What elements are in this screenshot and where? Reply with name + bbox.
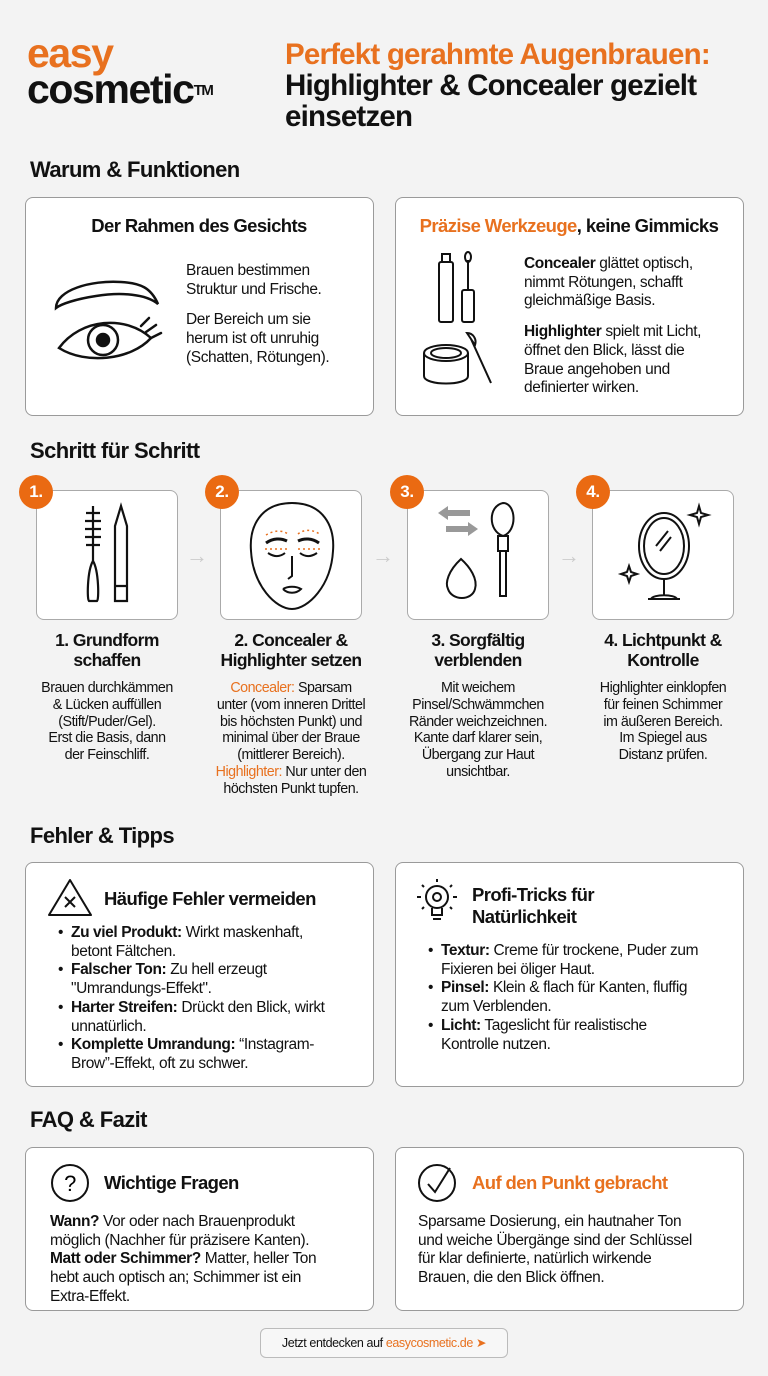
list: unnatürlich. — [71, 1018, 146, 1035]
number 3: 3. — [400, 482, 414, 501]
text: Struktur und Frische. Der Bereich um sie — [186, 281, 321, 328]
step 4 title: Kontrolle — [627, 650, 699, 670]
heading: FAQ & Fazit: FAQ & Fazit — [30, 1107, 147, 1132]
text — [524, 255, 701, 396]
text: (Schatten, Rötungen). — [186, 349, 329, 366]
step 3 text: Kante darf klarer sein, — [414, 730, 542, 746]
logo: cosmeticTM — [27, 66, 212, 112]
step 2 text: minimal über der Braue — [222, 730, 360, 746]
step 1 text: (Stift/Puder/Gel). — [58, 714, 156, 730]
step 3 text: Mit weichem — [441, 680, 515, 696]
icon: concealer tube — [438, 251, 475, 323]
arrow 2: → — [372, 543, 394, 568]
step 3 text: Pinsel/Schwämmchen — [412, 697, 544, 713]
step 1 title: schaffen — [73, 650, 141, 670]
panel title: Natürlichkeit — [472, 906, 576, 927]
step 4 text: Im Spiegel aus — [619, 730, 707, 746]
number 1 — [19, 475, 53, 509]
step 2 box — [220, 490, 362, 620]
step 3 text: Ränder weichzeichnen. — [409, 714, 547, 730]
heading: Schritt für Schritt: Schritt für Schritt — [30, 438, 200, 463]
text — [50, 1213, 316, 1305]
heading: Fehler & Tipps: Fehler & Tipps — [30, 823, 174, 848]
panel: Häufige Fehler — [25, 862, 374, 1087]
step 4 text — [600, 680, 726, 763]
text: definierter wirken. — [524, 379, 639, 396]
title: Perfekt gerahmte Augenbrauen: — [285, 38, 710, 71]
number 4: 4. — [586, 482, 600, 501]
step 1 text: Brauen durchkämmen — [41, 680, 173, 696]
text: Concealer glättet optisch, — [524, 255, 693, 272]
step 4 text: im äußeren Bereich. — [603, 714, 723, 730]
step 3 text — [409, 680, 547, 780]
list: Brow”-Effekt, oft zu schwer. — [71, 1055, 248, 1072]
step 2 title — [221, 630, 361, 670]
step 1 text: der Feinschliff. — [65, 747, 149, 763]
list: Falscher Ton: Zu hell erzeugt — [71, 961, 267, 978]
step 3 title: verblenden — [434, 650, 522, 670]
number 3 — [390, 475, 424, 509]
panel title: Auf den Punkt gebracht — [472, 1172, 667, 1193]
number 4 — [576, 475, 610, 509]
icon: question — [51, 1164, 89, 1202]
step 1 text: Erst die Basis, dann — [48, 730, 166, 746]
text: öffnet den Blick, lässt die — [524, 342, 684, 359]
step 1 box — [36, 490, 178, 620]
step 3 title — [431, 630, 525, 670]
step 1 text: & Lücken auffüllen — [53, 697, 161, 713]
panel: Präzise Werkzeuge — [395, 197, 744, 416]
icon: eye with brow — [54, 280, 162, 360]
text: Extra-Effekt. — [50, 1288, 130, 1305]
list — [428, 942, 698, 1053]
number 2 — [205, 475, 239, 509]
step 3 text: unsichtbar. — [446, 764, 510, 780]
title: Highlighter & Concealer gezielt — [285, 69, 696, 102]
icon: check — [418, 1164, 456, 1202]
icon: lightbulb — [417, 879, 457, 920]
list: Licht: Tageslicht für realistische — [441, 1017, 647, 1034]
panel title: Häufige Fehler vermeiden — [104, 888, 316, 909]
panel: Wichtige Fragen — [25, 1147, 374, 1311]
step 2 text: (mittlerer Bereich). — [237, 747, 345, 763]
panel title: Profi-Tricks für — [472, 884, 594, 905]
list — [58, 924, 325, 1072]
panel title: Präzise Werkzeuge, keine Gimmicks — [420, 215, 718, 236]
step 4 text: Distanz prüfen. — [619, 747, 707, 763]
list: "Umrandungs-Effekt". — [71, 980, 212, 997]
step 3 box — [407, 490, 549, 620]
text — [186, 262, 329, 366]
list: Kontrolle nutzen. — [441, 1036, 551, 1053]
number 2: 2. — [215, 482, 229, 501]
text — [418, 1213, 692, 1286]
text: Wann? Vor oder nach Brauenprodukt — [50, 1213, 295, 1230]
step 2 text: bis höchsten Punkt) und — [220, 714, 362, 730]
panel title: Der Rahmen des Gesichts — [91, 215, 307, 236]
step 2 title: Highlighter setzen — [221, 650, 361, 670]
text: Brauen, die den Blick öffnen. — [418, 1269, 604, 1286]
text: herum ist oft unruhig — [186, 330, 319, 347]
panel: Auf den Punkt gebracht — [395, 1147, 744, 1311]
panel title: Wichtige Fragen — [104, 1172, 239, 1193]
step 2 text: Concealer: Sparsam — [230, 680, 352, 696]
step 3 title: 3. Sorgfältig — [431, 630, 525, 650]
list: zum Verblenden. — [441, 998, 551, 1015]
text: Matt oder Schimmer? Matter, heller Ton — [50, 1250, 316, 1267]
step 2 text: höchsten Punkt tupfen. — [223, 781, 359, 797]
footer link pill — [260, 1328, 508, 1358]
step 2 text: Highlighter: Nur unter den — [216, 764, 366, 780]
list: Komplette Umrandung: “Instagram- — [71, 1036, 314, 1053]
text: hebt auch optisch an; Schimmer ist ein — [50, 1269, 301, 1286]
list: Pinsel: Klein & flach für Kanten, fluffig — [441, 979, 687, 996]
logo: easy — [27, 30, 113, 76]
panel: Rahmen des Gesichts — [25, 197, 374, 416]
list: Textur: Creme für trockene, Puder zum — [441, 942, 698, 959]
step 4 text: für feinen Schimmer — [604, 697, 722, 713]
panel title — [472, 884, 594, 927]
icon: warning x — [48, 879, 92, 916]
step 4 text: Highlighter einklopfen — [600, 680, 726, 696]
text: Brauen bestimmen — [186, 262, 310, 279]
icon: question: ? — [64, 1171, 76, 1196]
heading: Warum & Funktionen: Warum & Funktionen — [30, 157, 240, 182]
logo — [27, 30, 213, 112]
list: betont Fältchen. — [71, 943, 176, 960]
footer link pill: Jetzt entdecken auf easycosmetic.de ➤ — [282, 1336, 486, 1350]
icon: jar and brush — [423, 332, 492, 384]
step 3 text: Übergang zur Haut — [422, 747, 534, 763]
step 4 box — [592, 490, 734, 620]
list: Harter Streifen: Drückt den Blick, wirkt — [71, 999, 325, 1016]
step 4 title — [604, 630, 722, 670]
text: nimmt Rötungen, schafft — [524, 274, 683, 291]
arrow 1: → — [186, 543, 208, 568]
text: möglich (Nachher für präzisere Kanten). — [50, 1232, 309, 1249]
text: Sparsame Dosierung, ein hautnaher Ton — [418, 1213, 681, 1230]
text: und weiche Übergänge sind der Schlüssel — [418, 1232, 692, 1249]
list: Zu viel Produkt: Wirkt maskenhaft, — [71, 924, 303, 941]
step 1 text — [41, 680, 173, 763]
text: gleichmäßige Basis. Highlighter spielt mit Licht, — [524, 292, 701, 340]
step 1 title: 1. Grundform — [55, 630, 159, 650]
step 4 title: 4. Lichtpunkt & — [604, 630, 722, 650]
text: Braue angehoben und — [524, 361, 670, 378]
step 2 title: 2. Concealer & — [234, 630, 348, 650]
number 1: 1. — [29, 482, 43, 501]
step 2 text: unter (vom inneren Drittel — [217, 697, 365, 713]
panel: Profi-Tricks — [395, 862, 744, 1087]
step 1 title — [55, 630, 159, 670]
text: für klar definierte, natürlich wirkende — [418, 1250, 651, 1267]
arrow 3: → — [558, 543, 580, 568]
step 2 text — [216, 680, 366, 797]
list: Fixieren bei öliger Haut. — [441, 961, 595, 978]
title — [285, 38, 710, 133]
title: einsetzen — [285, 100, 412, 133]
